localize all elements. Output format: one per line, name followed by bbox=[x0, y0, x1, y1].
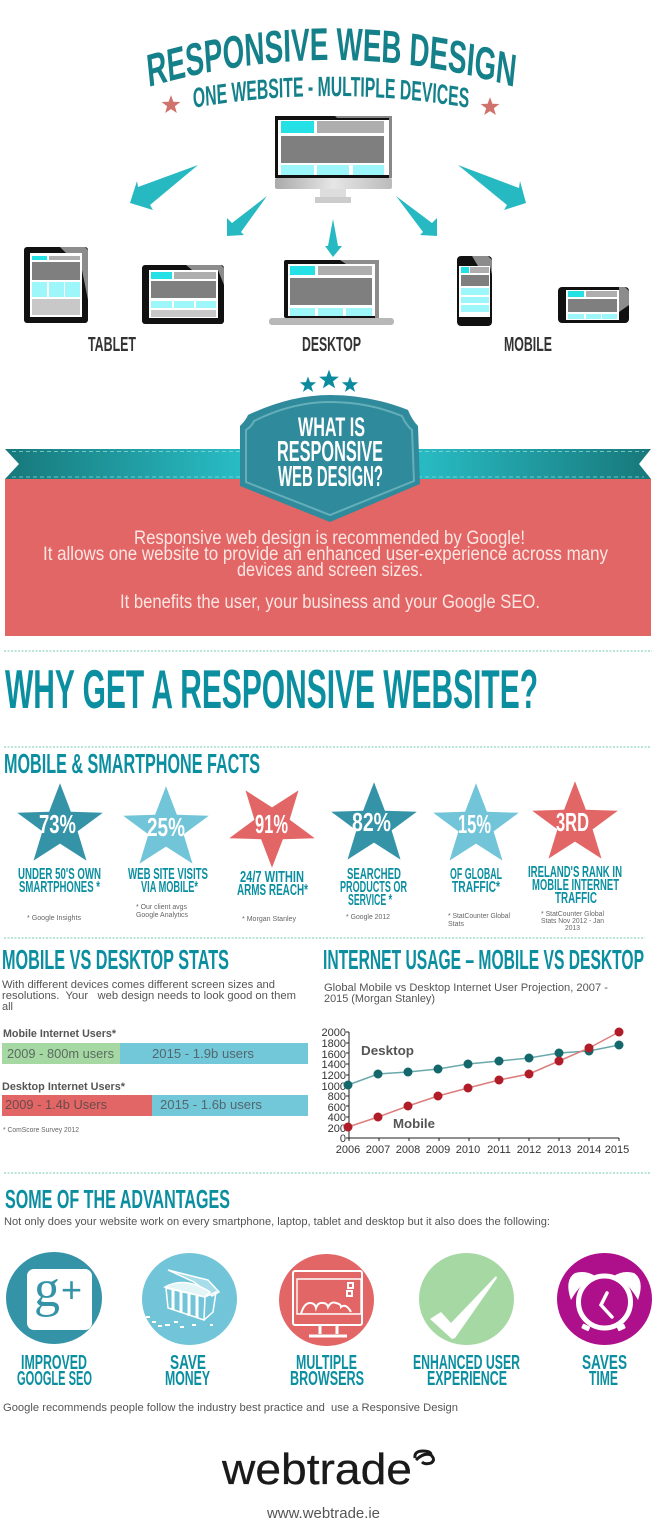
fact: 82 percent: PRODUCTS OR bbox=[340, 879, 407, 896]
fact: 82 percent bbox=[331, 782, 417, 921]
icon: desktop monitor bbox=[275, 116, 392, 203]
fact: 25 percent bbox=[123, 786, 209, 919]
chart description: 2015 (Morgan Stanley) bbox=[324, 993, 435, 1005]
stats paragraph bbox=[2, 979, 296, 1013]
bar: mobile internet users: 2015 - 1.9b users bbox=[152, 1046, 254, 1061]
stats paragraph: resolutions. Your web design needs to look good on them bbox=[2, 990, 296, 1002]
bar: mobile internet users: 2009 - 800m users bbox=[7, 1046, 114, 1061]
line chart: 1800 bbox=[322, 1038, 346, 1050]
advantage: multiple browsers bbox=[279, 1254, 374, 1390]
title: RESPONSIVE WEB DESIGN bbox=[147, 28, 516, 86]
subtitle: ONE WEBSITE - MULTIPLE DEVICES bbox=[193, 76, 469, 108]
advantage: multiple browsers: MULTIPLE bbox=[296, 1352, 357, 1374]
fact: 3rd: Stats Nov 2012 - Jan bbox=[541, 918, 604, 925]
stats paragraph: With different devices comes different screen sizes and bbox=[2, 979, 275, 991]
badge bbox=[240, 395, 420, 522]
icon: tablet landscape bbox=[142, 265, 224, 324]
line chart: 800 bbox=[328, 1091, 346, 1103]
source note: * ComScore Survey 2012 bbox=[3, 1127, 79, 1134]
advantage: enhanced user experience: EXPERIENCE bbox=[427, 1368, 507, 1390]
fact: 15 percent: TRAFFIC* bbox=[452, 879, 500, 896]
arrow: inner left bbox=[227, 196, 267, 236]
advantages intro: Not only does your website work on every smartphone, laptop, tablet and desktop but it also does the following: bbox=[4, 1216, 550, 1228]
chart description bbox=[324, 982, 608, 1005]
icon: tablet portrait bbox=[24, 247, 88, 323]
line chart: 2012 bbox=[517, 1144, 541, 1156]
closing note: Google recommends people follow the industry best practice and use a Responsive Design bbox=[3, 1402, 458, 1414]
fact: 15 percent: 15% bbox=[458, 809, 491, 839]
heading: mobile and smartphone facts: MOBILE & SMARTPHONE FACTS bbox=[4, 748, 260, 779]
advantage: google seo: + bbox=[61, 1269, 82, 1310]
advantage: saves time: TIME bbox=[589, 1368, 618, 1390]
icon: laptop bbox=[269, 260, 394, 325]
fact: 73 percent: UNDER 50'S OWN bbox=[18, 866, 101, 883]
heading: some of the advantages: SOME OF THE ADVANTAGES bbox=[5, 1184, 230, 1214]
line chart: 2007 bbox=[366, 1144, 390, 1156]
advantage: save money: SAVE bbox=[170, 1352, 206, 1374]
line chart: 2008 bbox=[396, 1144, 420, 1156]
label: mobile: MOBILE bbox=[504, 334, 552, 356]
arrow: far right bbox=[458, 165, 526, 210]
advantage: enhanced user experience bbox=[413, 1253, 520, 1390]
badge heading: WHAT IS bbox=[298, 412, 365, 442]
arrow: inner right bbox=[396, 196, 437, 236]
fact: 91 percent bbox=[229, 790, 315, 923]
advantage: saves time: SAVES bbox=[582, 1352, 627, 1374]
fact: 3rd: 2013 bbox=[565, 925, 580, 932]
bar: mobile internet users bbox=[2, 1028, 308, 1064]
line chart: 1000 bbox=[322, 1081, 346, 1093]
advantage: multiple browsers: BROWSERS bbox=[290, 1368, 364, 1390]
bar: desktop internet users: 2009 - 1.4b Users bbox=[5, 1097, 107, 1112]
icon: three stars bbox=[300, 370, 358, 392]
fact: 15 percent: Stats bbox=[448, 921, 464, 928]
fact: 15 percent bbox=[433, 783, 519, 928]
fact: 73 percent: SMARTPHONES * bbox=[19, 879, 100, 896]
arrow: far left bbox=[130, 165, 198, 210]
bar: desktop internet users: 2015 - 1.6b users bbox=[160, 1097, 262, 1112]
fact: 25 percent: WEB SITE VISITS bbox=[128, 866, 208, 883]
fact: 82 percent: SERVICE * bbox=[348, 892, 392, 909]
advantage: google seo: g bbox=[34, 1261, 60, 1318]
fact: 3rd: * StatCounter Global bbox=[541, 911, 604, 918]
fact: 91 percent: 24/7 WITHIN bbox=[240, 869, 304, 886]
arrow: centre bbox=[325, 219, 342, 257]
advantage: google seo: GOOGLE SEO bbox=[17, 1368, 92, 1390]
fact: 91 percent: ARMS REACH* bbox=[237, 882, 308, 899]
ribbon bbox=[5, 449, 651, 479]
fact: 25 percent: * Our client avgs bbox=[136, 904, 187, 911]
fact: 25 percent: Google Analytics bbox=[136, 912, 188, 919]
fact: 3rd: TRAFFIC bbox=[555, 890, 597, 907]
icon: left title star bbox=[162, 95, 180, 113]
fact: 91 percent: 91% bbox=[255, 809, 288, 839]
badge heading: RESPONSIVE bbox=[277, 436, 383, 468]
fact: 73 percent bbox=[17, 783, 103, 922]
intro text: devices and screen sizes. bbox=[237, 560, 423, 581]
line chart: 400 bbox=[328, 1112, 346, 1124]
stats paragraph: all bbox=[2, 1001, 13, 1013]
line chart: 2006 bbox=[336, 1144, 360, 1156]
line chart bbox=[322, 1027, 629, 1156]
intro text: It benefits the user, your business and your Google SEO. bbox=[120, 592, 540, 613]
series: mobile bbox=[344, 1028, 624, 1132]
advantage: google seo: IMPROVED bbox=[21, 1352, 87, 1374]
badge heading bbox=[277, 412, 383, 493]
fact: 15 percent: * StatCounter Global bbox=[448, 913, 510, 920]
bar: desktop internet users: Desktop Internet Users* bbox=[2, 1081, 126, 1093]
label: tablet: TABLET bbox=[88, 334, 136, 356]
line chart: 1200 bbox=[322, 1070, 346, 1082]
line chart: Mobile bbox=[393, 1116, 435, 1131]
line chart: 1600 bbox=[322, 1049, 346, 1061]
advantage: save money bbox=[142, 1253, 237, 1390]
fact: 3rd: 3RD bbox=[556, 807, 589, 837]
badge heading: WEB DESIGN? bbox=[278, 461, 383, 493]
icon: right title star bbox=[481, 97, 499, 115]
fact: 82 percent: * Google 2012 bbox=[346, 914, 390, 921]
label: desktop: DESKTOP bbox=[302, 334, 361, 356]
fact: 73 percent: * Google Insights bbox=[27, 915, 82, 922]
website url: www.webtrade.ie bbox=[266, 1505, 380, 1522]
advantage: google seo bbox=[6, 1252, 102, 1390]
line chart: 2014 bbox=[577, 1144, 601, 1156]
line chart: 2013 bbox=[547, 1144, 571, 1156]
line chart: 2011 bbox=[487, 1144, 511, 1156]
fact: 15 percent: OF GLOBAL bbox=[450, 866, 502, 883]
advantage: enhanced user experience: ENHANCED USER bbox=[413, 1352, 520, 1374]
fact: 82 percent: 82% bbox=[352, 807, 391, 837]
fact: 25 percent: VIA MOBILE* bbox=[141, 879, 198, 896]
line chart: 2000 bbox=[322, 1027, 346, 1039]
fact: 91 percent: * Morgan Stanley bbox=[242, 916, 296, 923]
fact: 25 percent: 25% bbox=[147, 812, 185, 842]
bar: desktop internet users bbox=[2, 1081, 308, 1116]
advantage: save money: MONEY bbox=[165, 1368, 210, 1390]
line chart: Desktop bbox=[361, 1043, 414, 1058]
line chart: 2015 bbox=[605, 1144, 629, 1156]
fact: 3rd bbox=[528, 781, 622, 932]
bar: mobile internet users: Mobile Internet Users* bbox=[3, 1028, 117, 1040]
icon: phone portrait bbox=[457, 256, 492, 326]
icon: phone landscape bbox=[558, 287, 629, 323]
panel: red intro box bbox=[5, 479, 651, 636]
advantage: saves time bbox=[557, 1253, 652, 1390]
line chart: 200 bbox=[328, 1123, 346, 1135]
line chart: 1400 bbox=[322, 1059, 346, 1071]
logo: webtrade: webtrade bbox=[221, 1445, 412, 1494]
chart description: Global Mobile vs Desktop Internet User Projection, 2007 - bbox=[324, 982, 608, 994]
line chart: 2010 bbox=[456, 1144, 480, 1156]
heading: mobile vs desktop stats: MOBILE VS DESKTOP STATS bbox=[2, 944, 229, 975]
fact: 73 percent: 73% bbox=[39, 809, 76, 839]
line chart: 600 bbox=[328, 1102, 346, 1114]
line chart: 0 bbox=[340, 1133, 346, 1145]
fact: 82 percent: SEARCHED bbox=[347, 866, 401, 883]
intro text bbox=[43, 528, 608, 613]
series: desktop bbox=[344, 1040, 624, 1090]
line chart: 2009 bbox=[426, 1144, 450, 1156]
intro text: Responsive web design is recommended by Google! bbox=[134, 528, 525, 549]
